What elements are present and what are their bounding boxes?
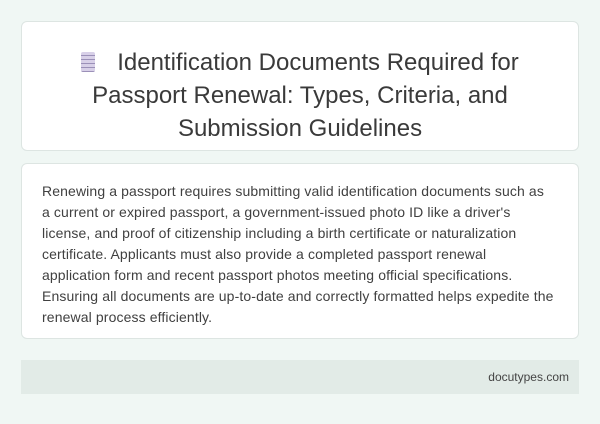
footer source: docutypes.com bbox=[488, 370, 569, 384]
body text: renewal process efficiently. bbox=[42, 309, 212, 325]
footer bbox=[21, 360, 579, 394]
body text: a current or expired passport, a government-issued photo ID like a driver's bbox=[42, 204, 510, 220]
title: Identification Documents Required for Passport Renewal: Types, Criteria, and Submission Guidelines bbox=[92, 49, 519, 142]
body text: certificate. Applicants must also provide a completed passport renewal bbox=[42, 246, 486, 262]
body text: license, and proof of citizenship including a birth certificate or naturalization bbox=[42, 225, 516, 241]
body text bbox=[42, 183, 554, 325]
body text: Ensuring all documents are up-to-date and correctly formatted helps expedite the bbox=[42, 288, 554, 304]
body text: application form and recent passport photos meeting official specifications. bbox=[42, 267, 512, 283]
title panel bbox=[21, 21, 579, 151]
icon: document bbox=[81, 52, 95, 72]
description panel bbox=[21, 163, 579, 339]
body text: Renewing a passport requires submitting valid identification documents such as bbox=[42, 183, 544, 199]
